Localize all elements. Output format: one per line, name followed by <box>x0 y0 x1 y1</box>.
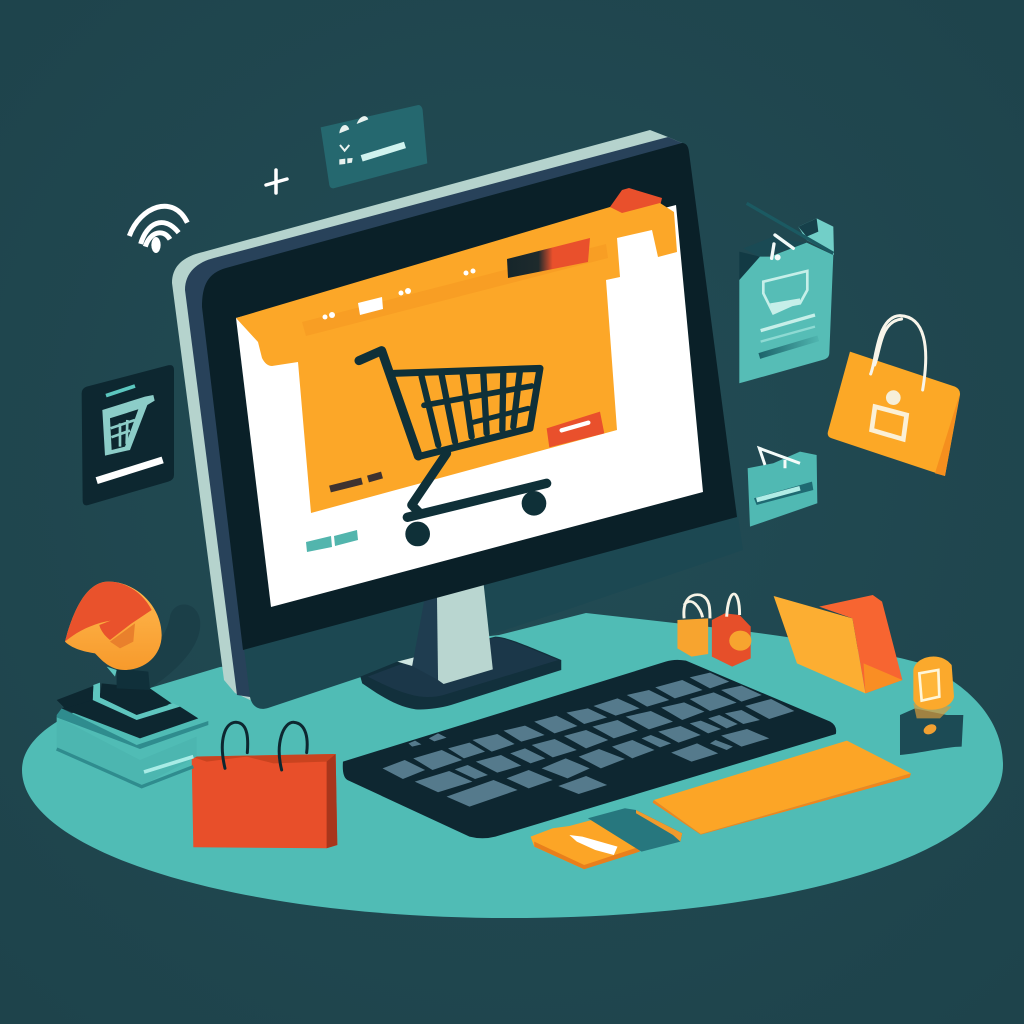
stand neck <box>412 593 438 680</box>
mouse pad <box>653 741 911 835</box>
monitor light rim <box>172 130 682 700</box>
monitor navy edge <box>185 137 690 697</box>
lamp shadow <box>117 605 200 688</box>
red shopping bag <box>192 722 337 848</box>
wallet <box>531 808 682 869</box>
keyboard <box>343 660 836 838</box>
small teal tag card <box>748 448 817 527</box>
lamp stem <box>117 668 150 690</box>
icon: plus <box>266 170 287 193</box>
navigation strip <box>302 244 608 336</box>
monitor stand <box>360 583 561 709</box>
orange shopping bag <box>828 316 960 476</box>
desk ellipse <box>22 613 1003 918</box>
monitor chin <box>243 510 743 709</box>
card: left dark basket <box>82 365 174 505</box>
lamp head <box>65 582 162 670</box>
pod <box>913 656 954 710</box>
red corner tab <box>610 188 662 216</box>
icon: wifi <box>129 206 187 253</box>
platform <box>62 693 198 738</box>
screen bezel <box>202 143 737 650</box>
small lock device <box>900 656 963 755</box>
orange page <box>236 203 677 513</box>
buy button <box>547 412 604 447</box>
nav items <box>322 268 476 320</box>
desk lamp on books <box>57 582 208 787</box>
keyboard body <box>343 660 836 838</box>
monitor <box>172 130 743 709</box>
thumbnail bars <box>306 530 358 552</box>
screen <box>236 205 703 607</box>
device light <box>913 703 952 718</box>
folder laptop <box>774 595 902 693</box>
small padlock bags <box>677 594 751 667</box>
tag card: right teal <box>739 203 834 383</box>
price text bars <box>330 475 382 489</box>
stack of books <box>57 717 197 787</box>
keyboard keys <box>383 673 794 807</box>
card: top teal <box>321 105 427 188</box>
shopping cart icon <box>359 351 547 544</box>
search bar <box>507 238 590 278</box>
device base <box>900 708 963 755</box>
stand base <box>360 637 561 709</box>
